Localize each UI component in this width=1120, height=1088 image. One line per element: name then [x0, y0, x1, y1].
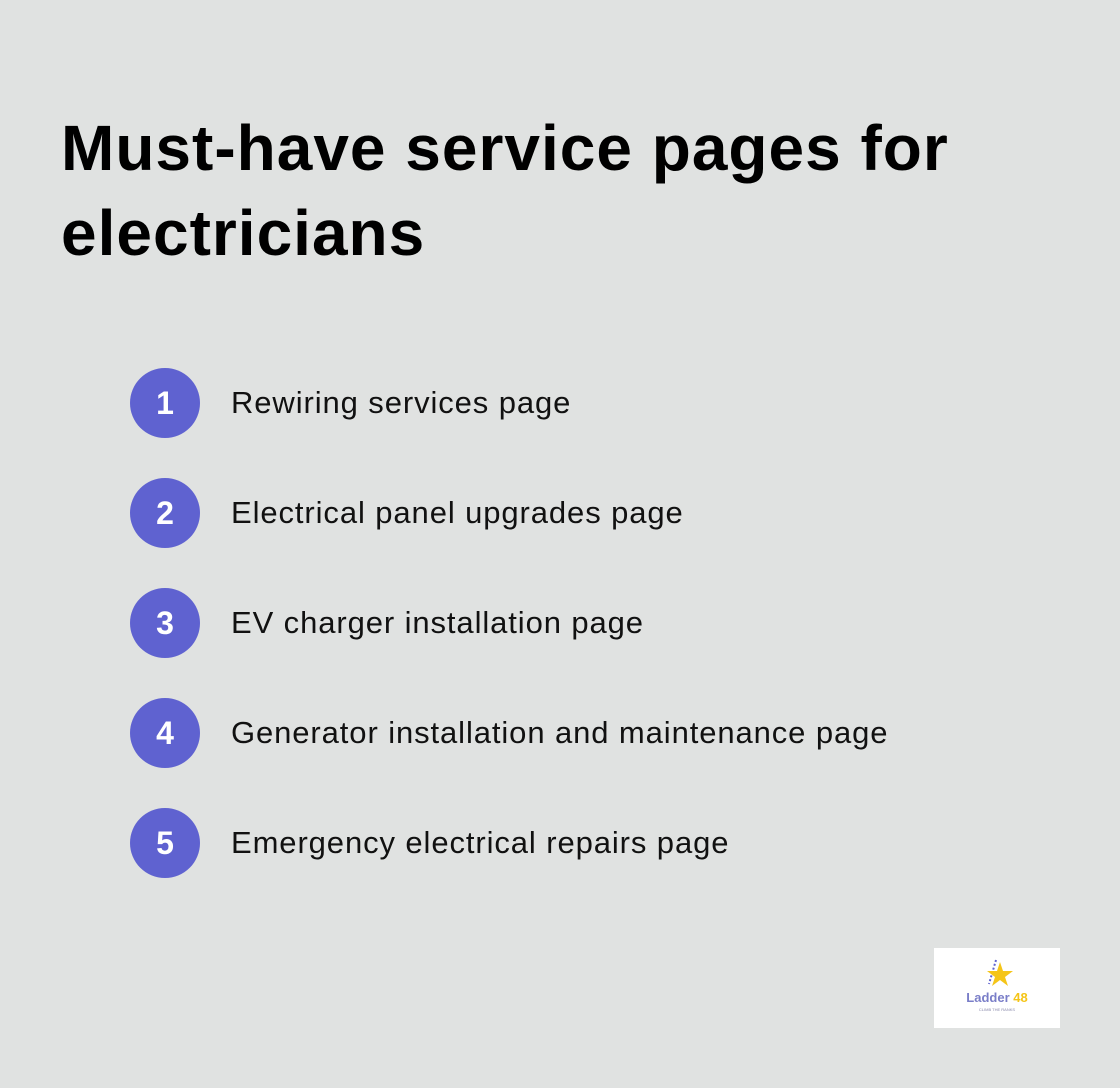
item 3: EV charger installation page	[231, 605, 644, 640]
item 4: Generator installation and maintenance page	[231, 715, 888, 750]
item 2: 2	[156, 495, 174, 531]
item 5: 5	[156, 825, 174, 861]
logo: Ladder 48: CLIMB THE RANKS	[979, 1007, 1015, 1012]
item 4	[130, 698, 888, 768]
title	[61, 112, 949, 269]
item 2	[130, 478, 684, 548]
logo: Ladder 48	[934, 948, 1060, 1028]
item 3	[130, 588, 644, 658]
item 5: Emergency electrical repairs page	[231, 825, 729, 860]
item 5	[130, 808, 729, 878]
item 3: 3	[156, 605, 174, 641]
item 2: Electrical panel upgrades page	[231, 495, 684, 530]
logo: Ladder 48: Ladder 48	[966, 990, 1028, 1005]
item 4: 4	[156, 715, 174, 751]
item 1	[130, 368, 571, 438]
item 1: 1	[156, 385, 174, 421]
title: electricians	[61, 197, 425, 269]
item 1: Rewiring services page	[231, 385, 571, 420]
title: Must-have service pages for	[61, 112, 949, 184]
